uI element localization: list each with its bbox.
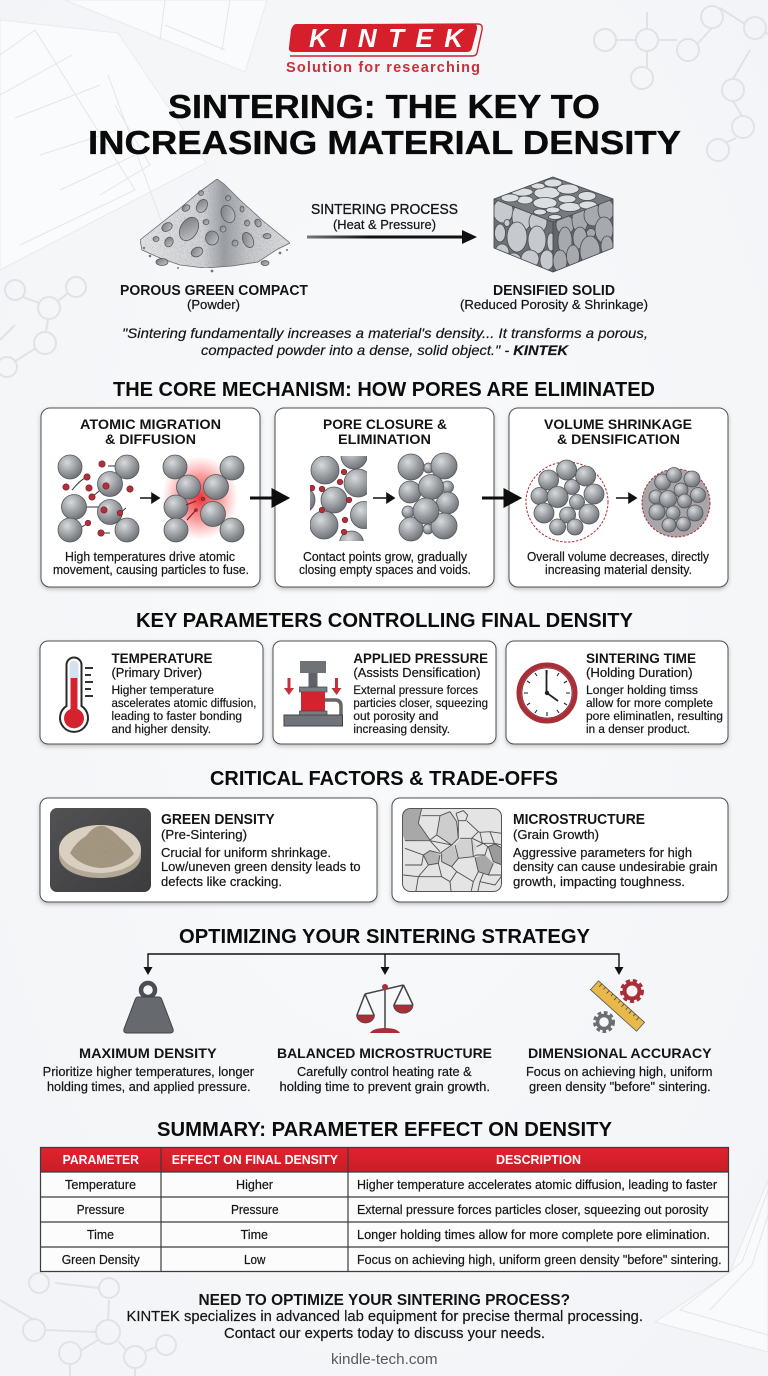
illustration: porous powder pile <box>140 179 290 272</box>
table rows: Focus on achieving high, uniform green density "before" sintering. <box>357 1253 722 1267</box>
icon: balance scale <box>356 984 413 1033</box>
caption: High temperatures drive atomic <box>65 550 235 564</box>
caption: movement, causing particles to fuse. <box>53 563 249 577</box>
panel heading <box>80 416 221 447</box>
caption <box>299 550 471 577</box>
parameter text <box>353 650 488 736</box>
factor text <box>513 812 718 889</box>
parameter text: particies closer, squeezing <box>353 696 488 710</box>
image: powder on a disc <box>50 808 151 892</box>
label: porous green compact: POROUS GREEN COMPACT <box>120 283 308 299</box>
illustration: densified solid cube <box>493 177 614 272</box>
table header <box>40 1147 729 1172</box>
factor text: density can cause undesirabie grain <box>513 859 718 874</box>
parameter text: pore eliminatlen, resulting <box>586 709 723 723</box>
arrow: sintering process: SINTERING PROCESS <box>311 202 458 218</box>
arrow <box>140 494 159 502</box>
heading: key parameters: KEY PARAMETERS CONTROLLING FINAL DENSITY <box>136 610 634 632</box>
icon: clock <box>519 665 575 721</box>
table header: EFFECT ON FINAL DENSITY <box>172 1153 339 1167</box>
panel heading: ATOMIC MIGRATION <box>80 416 221 432</box>
parameter text: (Primary Driver) <box>112 666 202 680</box>
strategy text: Carefully control heating rate & <box>297 1065 472 1079</box>
strategy: dimensional accuracy <box>526 981 712 1094</box>
caption <box>527 550 710 577</box>
panel: pore closure and elimination <box>275 408 494 587</box>
parameter text: (Assists Densification) <box>353 666 481 680</box>
table rows: Higher <box>236 1178 273 1192</box>
parameter text: TEMPERATURE <box>112 650 212 666</box>
website address: kindle-tech.com <box>331 1352 438 1368</box>
arrow: step two to step three <box>482 490 519 506</box>
table rows: Higher temperature accelerates atomic diffusion, leading to faster <box>357 1178 717 1192</box>
label: densified solid: DENSIFIED SOLID <box>493 283 615 299</box>
strategy text <box>526 1045 712 1094</box>
heading: critical factors: CRITICAL FACTORS & TRADE-OFFS <box>210 768 558 790</box>
arrow: step one to step two <box>250 490 287 506</box>
table header: DESCRIPTION <box>496 1153 581 1167</box>
diagram: particles before diffusion <box>58 455 139 542</box>
caption: Contact points grow, gradually <box>303 550 468 564</box>
diagram: particles fusing with heat glow <box>162 455 244 542</box>
table rows: External pressure forces particles closer, squeezing out porosity <box>357 1203 709 1217</box>
table rows: Longer holding times allow for more complete pore elimination. <box>357 1228 710 1242</box>
panel: sintering time <box>506 641 728 744</box>
factor text: growth, impacting toughness. <box>513 874 685 889</box>
panel heading: PORE CLOSURE & <box>323 416 447 432</box>
table rows: Temperature <box>65 1178 136 1192</box>
arrow <box>616 494 636 502</box>
panel heading <box>544 416 692 447</box>
panel: atomic migration and diffusion <box>41 408 260 587</box>
quote <box>122 325 648 358</box>
factor text: (Grain Growth) <box>513 828 599 842</box>
panel heading: VOLUME SHRINKAGE <box>544 416 692 432</box>
factor text <box>161 812 361 889</box>
table rows: Low <box>244 1253 266 1267</box>
parameter text: ascelerates atomic diffusion, <box>112 696 256 710</box>
factor text: defects like cracking. <box>161 874 282 889</box>
table rows: Green Density <box>62 1253 140 1267</box>
call to action: KINTEK specializes in advanced lab equipment for precise thermal processing. <box>126 1309 643 1325</box>
panel heading: ELIMINATION <box>338 431 431 447</box>
parameter text: APPLIED PRESSURE <box>353 650 488 666</box>
strategy text: holding times, and applied pressure. <box>47 1080 251 1094</box>
quote: "Sintering fundamentally increases a material's density... It transforms a porous, <box>122 325 648 341</box>
label: porous green compact <box>120 283 308 312</box>
diagram: loose particle cluster <box>526 460 608 542</box>
parameter text: allow for more complete <box>586 696 713 710</box>
parameter text: and higher density. <box>112 722 211 736</box>
label: densified solid <box>460 283 648 312</box>
strategy text: BALANCED MICROSTRUCTURE <box>277 1045 492 1061</box>
arrow: sintering process <box>307 202 477 244</box>
factor text: Aggressive parameters for high <box>513 845 692 860</box>
heading: optimizing strategy: OPTIMIZING YOUR SINTERING STRATEGY <box>179 926 591 948</box>
call to action: Contact our experts today to discuss your needs. <box>224 1326 545 1342</box>
parameter text: increasing density. <box>353 722 450 736</box>
icon: hydraulic press <box>284 661 342 726</box>
caption: increasing material density. <box>545 563 692 577</box>
table rows <box>62 1178 722 1267</box>
table header: PARAMETER <box>63 1153 139 1167</box>
parameter text <box>112 650 256 736</box>
strategy: maximum density <box>43 983 254 1094</box>
image: grain micrograph <box>402 808 502 897</box>
parameter text: External pressure forces <box>353 683 478 697</box>
caption: Overall volume decreases, directly <box>527 550 710 564</box>
panel: volume shrinkage and densification <box>509 408 728 587</box>
quote: compacted powder into a dense, solid object." - KINTEK <box>201 342 569 358</box>
strategy text: green density "before" sintering. <box>529 1080 711 1094</box>
strategy: balanced microstructure <box>277 984 492 1094</box>
arrow: sintering process: (Heat & Pressure) <box>333 218 436 232</box>
panel: green density <box>40 798 377 902</box>
icon: thermometer <box>60 658 93 732</box>
process diagram <box>120 177 648 312</box>
parameter text: Longer holding timss <box>586 683 698 697</box>
diagram: open pores between particles <box>310 456 367 541</box>
parameter text: (Holding Duration) <box>586 666 693 680</box>
logo <box>286 23 482 76</box>
table rows: Time <box>241 1228 268 1242</box>
diagram: densified particle cluster <box>642 468 710 537</box>
factor text: Crucial for uniform shrinkage. <box>161 845 331 860</box>
table rows: Pressure <box>77 1203 125 1217</box>
panel: microstructure <box>392 798 728 902</box>
table rows: Time <box>87 1228 114 1242</box>
logo: KINTEK <box>309 23 465 53</box>
panel heading: & DIFFUSION <box>105 431 196 447</box>
icon: weight <box>124 983 173 1033</box>
title: INCREASING MATERIAL DENSITY <box>88 124 681 161</box>
table rows: Pressure <box>231 1203 279 1217</box>
factor text: (Pre-Sintering) <box>161 828 247 842</box>
panel heading: & DENSIFICATION <box>557 431 680 447</box>
title: SINTERING: THE KEY TO <box>168 88 600 125</box>
call to action <box>126 1292 643 1342</box>
strategy text: DIMENSIONAL ACCURACY <box>528 1045 712 1061</box>
factor text: MICROSTRUCTURE <box>513 812 645 828</box>
factor text: Low/uneven green density leads to <box>161 859 361 874</box>
heading: summary: SUMMARY: PARAMETER EFFECT ON DENSITY <box>157 1119 613 1141</box>
factor text: GREEN DENSITY <box>161 812 275 828</box>
parameter text: leading to faster bonding <box>112 709 242 723</box>
parameter text: Higher temperature <box>112 683 214 697</box>
summary table <box>40 1147 729 1272</box>
strategy text <box>43 1045 254 1094</box>
title <box>88 88 681 161</box>
icon: ruler and gears <box>590 981 645 1031</box>
heading: core mechanism: THE CORE MECHANISM: HOW PORES ARE ELIMINATED <box>113 379 655 401</box>
diagram: closed pores <box>398 453 458 541</box>
panel: temperature <box>40 641 263 744</box>
strategy text: Prioritize higher temperatures, longer <box>43 1065 254 1079</box>
caption: closing empty spaces and voids. <box>299 563 471 577</box>
strategy text: Focus on achieving high, uniform <box>526 1065 712 1079</box>
panel heading <box>323 416 447 447</box>
parameter text: out porosity and <box>353 709 439 723</box>
strategy text: holding time to prevent grain growth. <box>280 1080 490 1094</box>
panel: applied pressure <box>273 641 496 744</box>
caption <box>53 550 249 577</box>
parameter text <box>586 650 723 736</box>
strategy flow arrows <box>144 954 624 975</box>
label: porous green compact: (Powder) <box>187 298 240 312</box>
logo: Solution for researching <box>286 60 480 76</box>
parameter text: in a denser product. <box>586 722 690 736</box>
strategy text: MAXIMUM DENSITY <box>79 1045 217 1061</box>
parameter text: SINTERING TIME <box>586 650 696 666</box>
arrow <box>373 494 394 502</box>
call to action: NEED TO OPTIMIZE YOUR SINTERING PROCESS? <box>198 1292 570 1309</box>
label: densified solid: (Reduced Porosity & Shrinkage) <box>460 298 648 312</box>
strategy text <box>277 1045 492 1094</box>
